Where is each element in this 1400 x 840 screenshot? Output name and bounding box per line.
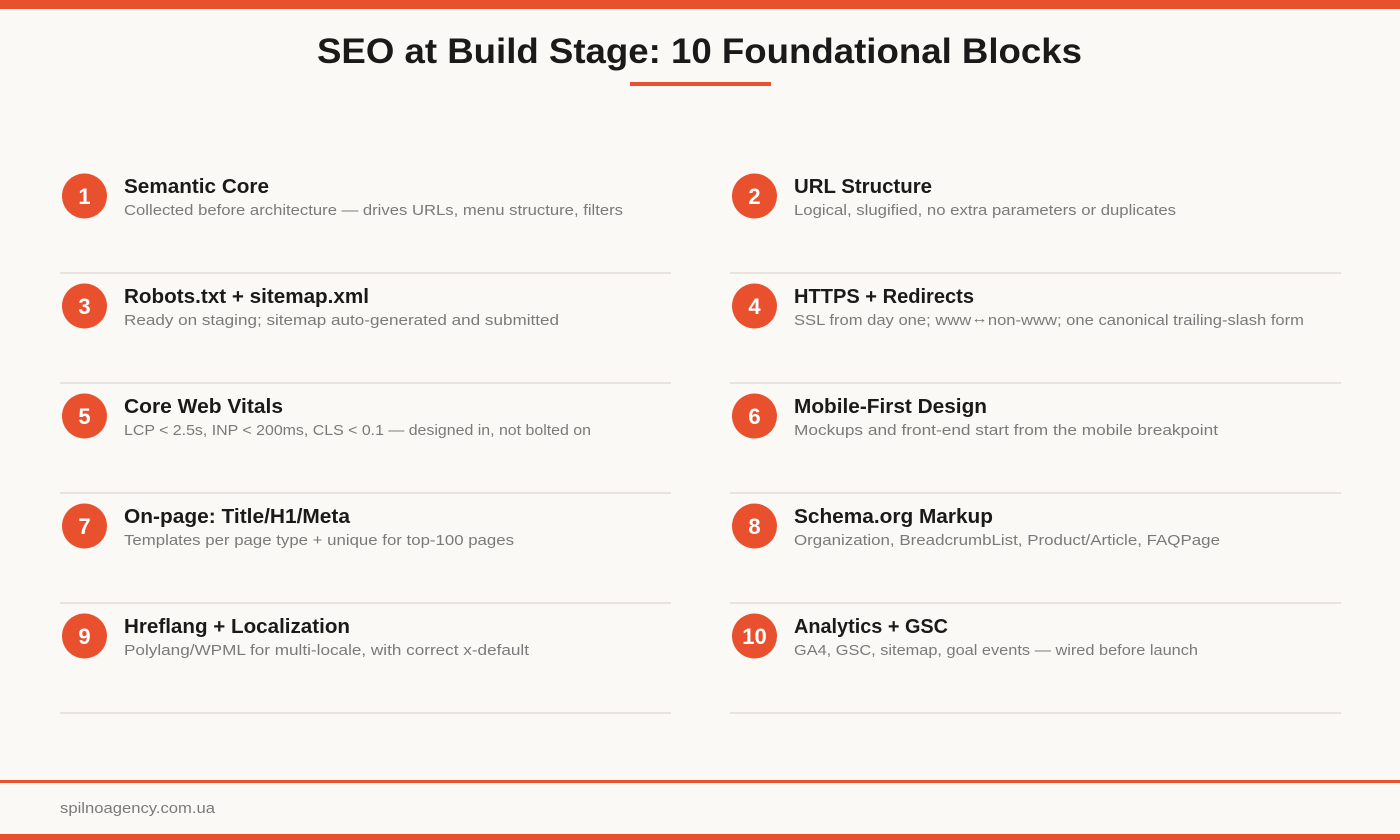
block 4: HTTPS + Redirects [732, 284, 1304, 329]
block 7: On-page: Title/H1/Meta: On-page: Title/H1/Meta [124, 506, 351, 528]
block 2: URL Structure: 2 [748, 184, 761, 209]
block 10: Analytics + GSC: Analytics + GSC [794, 616, 948, 638]
block 4: HTTPS + Redirects: non-www; one canonical trailing-slash form [988, 312, 1304, 329]
block 8: Schema.org Markup: Organization, BreadcrumbList, Product/Article, FAQPage [794, 532, 1220, 549]
block 10: Analytics + GSC: GA4, GSC, sitemap, goal events — wired before launch [794, 642, 1198, 659]
block 5: Core Web Vitals: Core Web Vitals [124, 396, 283, 418]
block 6: Mobile-First Design: Mockups and front-end start from the mobile breakpoint [794, 422, 1219, 439]
block 2: URL Structure: Logical, slugified, no extra parameters or duplicates [794, 202, 1176, 219]
top accent bar [0, 0, 1400, 9]
footer rule [0, 780, 1400, 783]
block 9: Hreflang + Localization: Polylang/WPML for multi-locale, with correct x-default [124, 642, 530, 659]
block 10: Analytics + GSC: 10 [742, 624, 767, 649]
block 9: Hreflang + Localization [62, 614, 530, 659]
block 2: URL Structure: URL Structure [794, 176, 932, 198]
block 1: Semantic Core: Semantic Core [124, 176, 269, 198]
block 4: HTTPS + Redirects: 4 [748, 294, 761, 319]
title underline [630, 82, 771, 86]
block 2: URL Structure [732, 174, 1176, 219]
block 8: Schema.org Markup [732, 504, 1220, 549]
block 4: HTTPS + Redirects: HTTPS + Redirects [794, 286, 974, 308]
title: SEO at Build Stage: 10 Foundational Blocks [317, 32, 1082, 71]
block 8: Schema.org Markup: 8 [748, 514, 761, 539]
block 7: On-page: Title/H1/Meta: Templates per page type + unique for top-100 pages [124, 532, 514, 549]
block 3: Robots.txt + sitemap.xml: Ready on staging; sitemap auto-generated and submitted [124, 312, 559, 329]
block 1: Semantic Core: Collected before architecture — drives URLs, menu structure, filters [124, 202, 623, 219]
footer text: spilnoagency.com.ua [60, 800, 216, 817]
block 6: Mobile-First Design: 6 [748, 404, 761, 429]
block 3: Robots.txt + sitemap.xml: 3 [78, 294, 91, 319]
block 7: On-page: Title/H1/Meta: 7 [78, 514, 91, 539]
block 8: Schema.org Markup: Schema.org Markup [794, 506, 993, 528]
block 6: Mobile-First Design [732, 394, 1219, 439]
block 1: Semantic Core [62, 174, 623, 219]
block 5: Core Web Vitals: LCP < 2.5s, INP < 200ms, CLS < 0.1 — designed in, not bolted on [124, 422, 591, 439]
block 5: Core Web Vitals: 5 [78, 404, 91, 429]
block 9: Hreflang + Localization: Hreflang + Localization [124, 616, 350, 638]
block 5: Core Web Vitals [62, 394, 591, 439]
block 7: On-page: Title/H1/Meta [62, 504, 514, 549]
block 4: HTTPS + Redirects: SSL from day one; www [794, 312, 954, 329]
block 4: HTTPS + Redirects: ↔ [971, 310, 988, 327]
bottom accent bar [0, 834, 1400, 840]
block 9: Hreflang + Localization: 9 [78, 624, 91, 649]
block 3: Robots.txt + sitemap.xml [62, 284, 559, 329]
block 10: Analytics + GSC [732, 614, 1198, 659]
block 1: Semantic Core: 1 [78, 184, 91, 209]
block 6: Mobile-First Design: Mobile-First Design [794, 396, 987, 418]
block 3: Robots.txt + sitemap.xml: Robots.txt + sitemap.xml [124, 286, 369, 308]
